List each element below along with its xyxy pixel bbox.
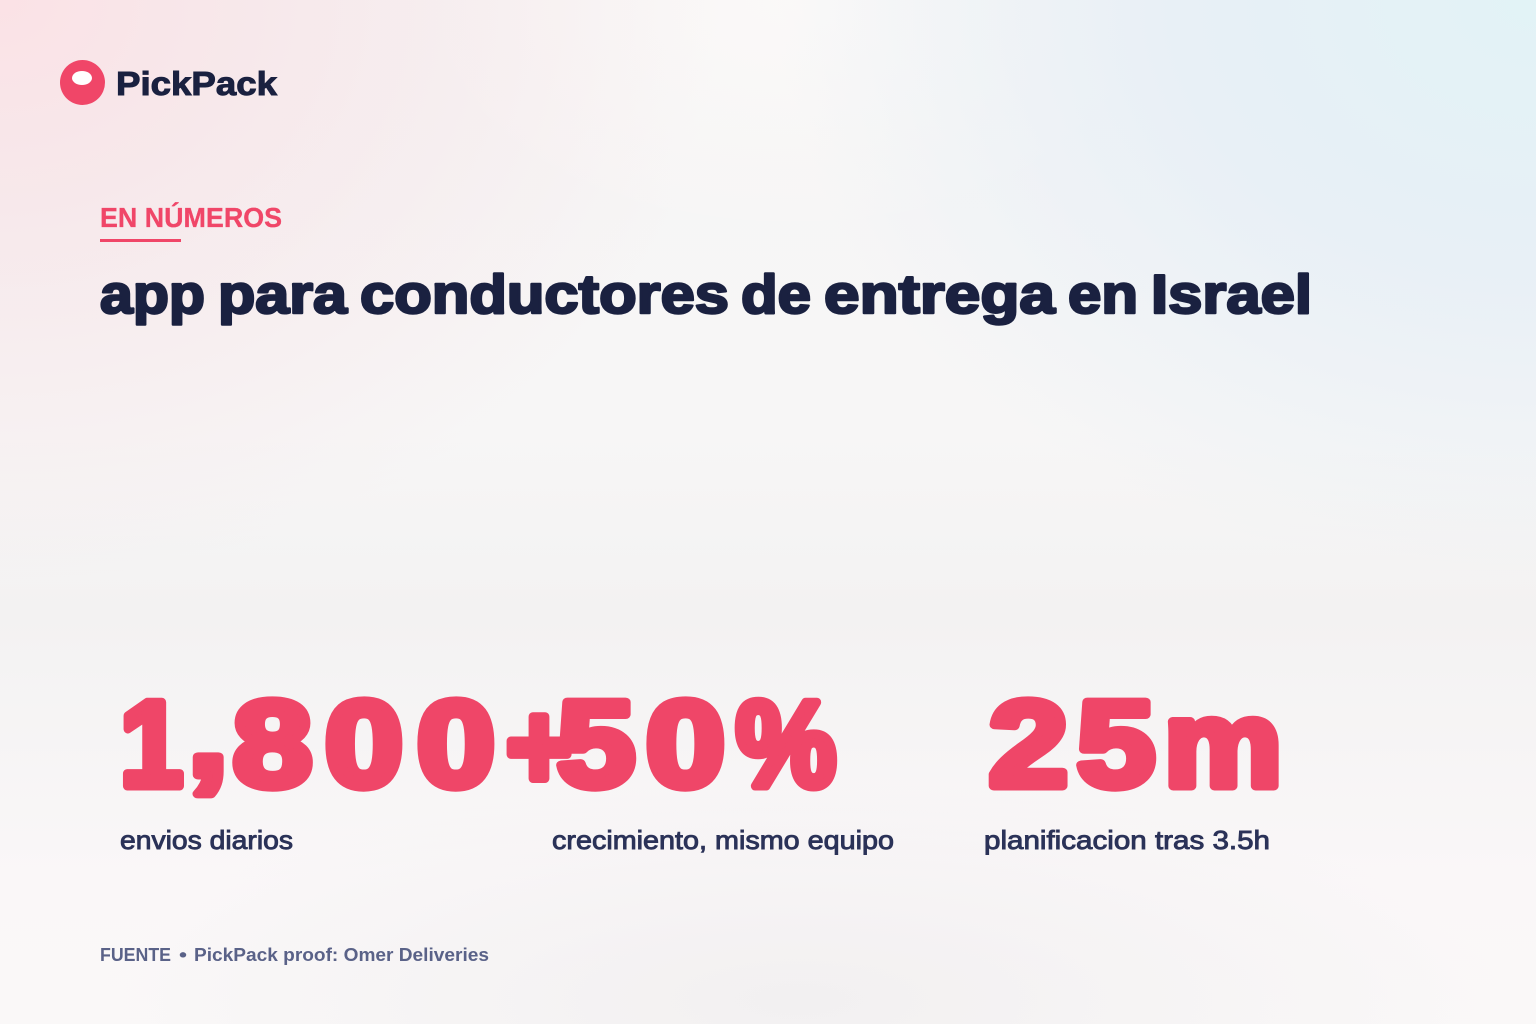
stat: envios diarios: 8 [233,676,312,812]
stat: envios diarios: 0 [325,676,403,812]
stat: envios diarios: 1 [120,676,183,812]
stat: envios diarios: , [188,665,228,801]
source line: PickPack proof: Omer Deliveries [194,945,489,965]
stat: crecimiento: % [736,676,836,812]
stat: envios diarios [120,665,572,855]
icon: logo circle with eye [60,60,105,105]
title: para [218,263,347,325]
stat: planificacion: m [1164,676,1282,812]
title: de [741,263,811,325]
stat: envios diarios: envios diarios [120,825,293,855]
title: Israel [1151,263,1312,325]
stat: crecimiento: crecimiento, mismo equipo [552,825,894,855]
stat: envios diarios: 0 [417,676,495,812]
eyebrow heading: EN NÚMEROS [100,202,282,233]
title: conductores [360,263,729,325]
logo wordmark: PickPack [116,65,278,102]
stat: planificacion: planificacion tras 3.5h [984,825,1270,855]
stat: planificacion: 5 [1077,676,1155,812]
source line: FUENTE [100,945,171,965]
stat: planificacion: 2 [989,676,1068,812]
logo: PickPack [60,60,278,105]
stat: crecimiento: 0 [646,676,725,812]
stat: crecimiento: 5 [557,676,635,812]
stat: crecimiento [552,676,894,855]
stat: envios diarios: + [506,678,572,814]
source line: • [179,945,187,965]
stat: planificacion [984,676,1282,855]
title: entrega [824,263,1055,325]
title: app [100,263,205,325]
title: en [1068,263,1138,325]
